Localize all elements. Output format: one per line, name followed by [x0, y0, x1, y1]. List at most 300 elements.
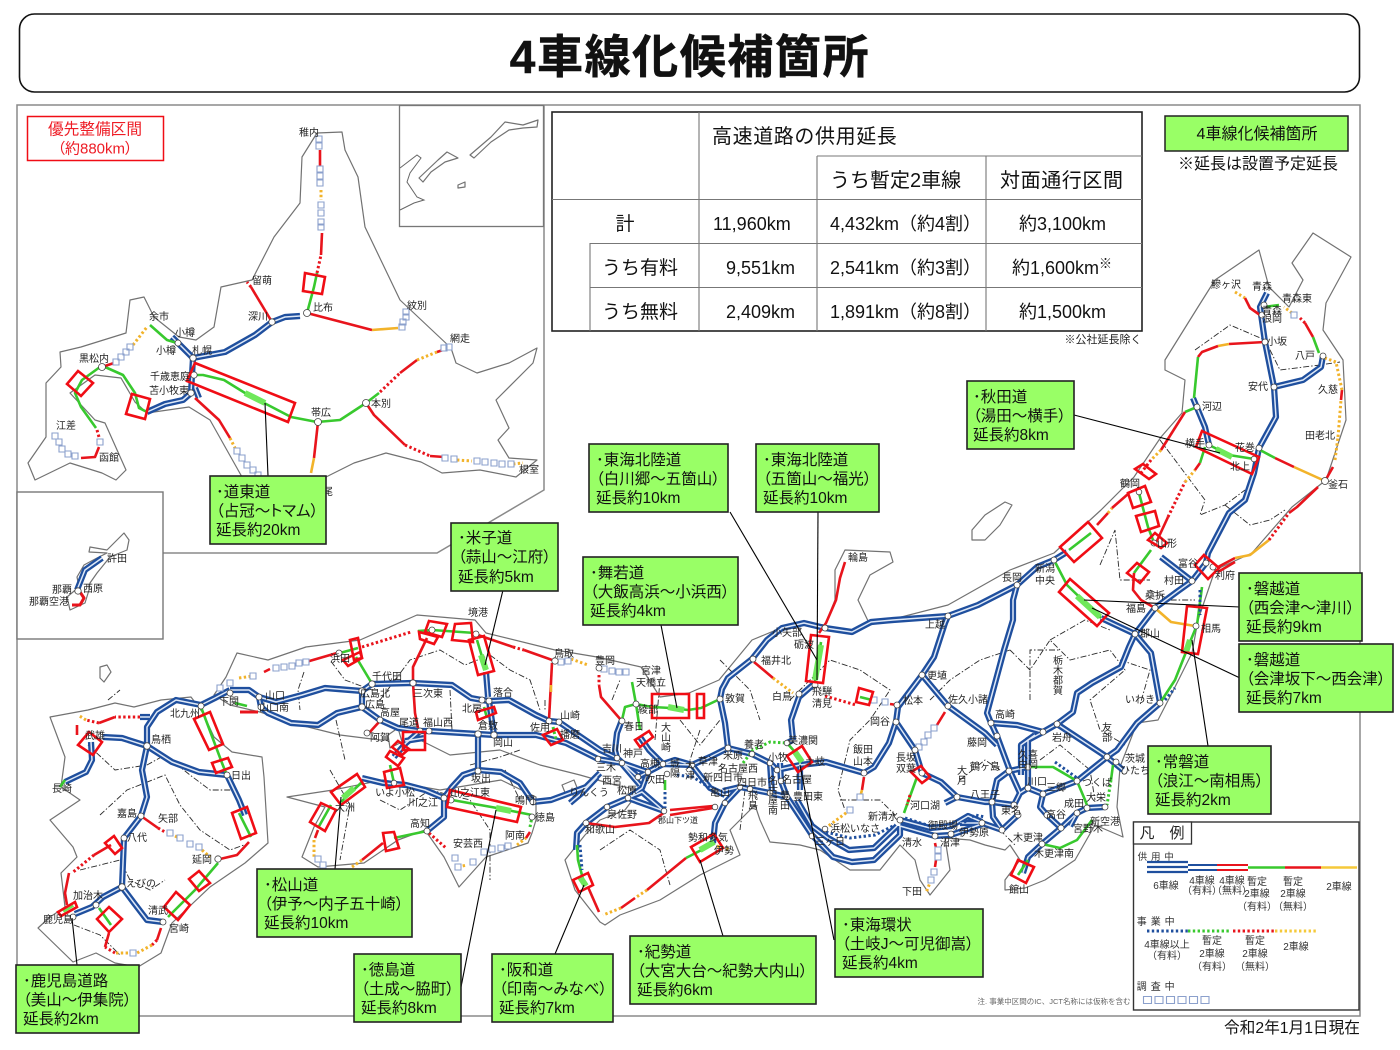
place-name labels: Tohoku: 河辺: [1202, 401, 1222, 413]
callout: 松山道: 延長約10km: [264, 914, 348, 932]
place-name labels: Hokkaido: 余市: [149, 310, 169, 323]
place-name labels: Tohoku: 八戸: [1295, 350, 1315, 362]
callout: priority section key: [28, 116, 164, 160]
place-name labels: Hokkaido: 帯広: [311, 406, 331, 419]
place-name labels: Chugoku and Kansai: 浜田: [330, 653, 350, 665]
place-name labels: Chubu and Kanto: 木更津南: [1034, 847, 1074, 860]
table: expressway length: 1,891km（約8割）: [830, 302, 981, 322]
legend: 2車線: [1280, 887, 1306, 900]
place-name labels: Chugoku and Kansai: りんくう: [569, 787, 609, 799]
place-name labels: Chubu and Kanto: 大月: [954, 764, 966, 786]
place-name labels: Hokkaido: [56, 126, 539, 498]
place-name labels: Chugoku and Kansai: 三次東: [413, 687, 443, 700]
coloured road sections: Tohoku: [1054, 292, 1342, 703]
place-name labels: Chugoku and Kansai: 天橋立: [636, 676, 666, 689]
callout: 阪和道: [492, 954, 613, 1022]
callout: 道東道: ･道東道: [216, 483, 270, 501]
legend: （無料）: [1273, 900, 1313, 913]
callout: 磐越道 会津坂下: （会津坂下～西会津）: [1246, 670, 1386, 688]
place-name labels: Chugoku and Kansai: 豊田東: [793, 790, 823, 803]
place-name labels: Tohoku: 浪岡: [1262, 313, 1282, 325]
place-name labels: Chugoku and Kansai: 四日市: [737, 776, 767, 789]
place-name labels: Chugoku and Kansai: 広島北: [360, 687, 390, 700]
title: 4車線化候補箇所: [510, 31, 870, 83]
callout: 磐越道 西会津: [1239, 573, 1362, 641]
place-name labels: Hokkaido: 苫小牧東: [149, 384, 189, 397]
legend: 調 査 中: [1137, 980, 1175, 993]
callout: 東海北陸道 五箇山: （五箇山～福光）: [763, 470, 872, 488]
coloured road sections: Hokkaido: [75, 150, 523, 473]
place-name labels: Chugoku and Kansai: 鳥取: [554, 647, 574, 660]
callout: 東海環状: 延長約4km: [842, 954, 918, 972]
place-name labels: Hokkaido: 札幌: [192, 344, 212, 357]
place-name labels: Chubu and Kanto: 岡谷: [870, 716, 890, 728]
callout: 舞若道: 延長約4km: [590, 602, 666, 620]
callout: 東海北陸道 五箇山: [756, 444, 879, 512]
footnote: provisional names: 注. 事業中区間のIC、JCT名称には仮称を含む: [978, 996, 1130, 1006]
place-name labels: Tohoku: 花巻: [1235, 441, 1255, 454]
place-name labels: Tohoku: 富谷: [1178, 557, 1198, 570]
place-name labels: Chubu and Kanto: 伊勢原: [959, 826, 989, 839]
legend: 2車線: [1244, 887, 1270, 900]
place-name labels: Chubu and Kanto: 友部: [1100, 721, 1112, 743]
place-name labels: Chugoku and Kansai: 名古屋西: [718, 762, 758, 775]
place-name labels: Hokkaido: 千歳恵庭: [150, 370, 190, 383]
callout: 磐越道 西会津: ･磐越道: [1246, 580, 1300, 598]
place-name labels: Tohoku: いわき: [1125, 694, 1155, 706]
place-name labels: Kyushu and Shikoku: 清武: [148, 904, 168, 917]
place-name labels: Tohoku: 青森: [1262, 304, 1282, 317]
place-name labels: Chubu and Kanto: 山本: [853, 755, 873, 768]
Okinawa labels: 那覇空港: [29, 596, 69, 608]
place-name labels: Tohoku: 北上: [1230, 461, 1250, 473]
table: expressway length: [552, 112, 1142, 331]
place-name labels: Tohoku: 小坂: [1267, 335, 1287, 348]
place-name labels: Chubu and Kanto: 白岡: [1018, 758, 1038, 771]
place-name labels: Hokkaido: 留萌: [252, 274, 272, 287]
table: expressway length: 4,432km（約4割）: [830, 214, 981, 234]
place-name labels: Chugoku and Kansai: 草津: [698, 756, 718, 768]
place-name labels: Tohoku: ひたち: [1120, 765, 1150, 777]
place-name labels: Chubu and Kanto: 飛島: [746, 790, 758, 811]
place-name labels: Chubu and Kanto: 新空港: [1090, 816, 1120, 828]
callout: 磐越道 西会津: 延長約9km: [1246, 618, 1322, 636]
callout: 松山道: [257, 869, 412, 937]
place-name labels: Kyushu and Shikoku: 北九州: [170, 708, 200, 720]
place-name labels: Kyushu and Shikoku: 徳島: [535, 811, 555, 824]
place-name labels: Chugoku and Kansai: 岡山: [493, 737, 513, 749]
legend: 4車線: [1189, 874, 1215, 887]
place-name labels: Hokkaido: 比布: [313, 302, 333, 314]
place-name labels: Chugoku and Kansai: 高屋: [380, 706, 400, 719]
place-name labels: Chugoku and Kansai: 勢和多気: [688, 831, 728, 844]
place-name labels: Kyushu and Shikoku: 安芸西: [453, 837, 483, 850]
place-name labels: Kyushu and Shikoku: 阿南: [505, 829, 525, 842]
place-name labels: Tohoku: 青森: [1252, 280, 1272, 293]
place-name labels: Tohoku: 久慈: [1318, 383, 1338, 396]
place-name labels: Chugoku and Kansai: 広島: [365, 698, 385, 711]
place-name labels: Chugoku and Kansai: 倉敷: [478, 719, 498, 732]
legend: [1134, 822, 1359, 1010]
place-name labels: Hokkaido: 稚内: [299, 126, 319, 139]
legend: （有料）: [1237, 900, 1277, 913]
place-name labels: Chugoku and Kansai: 福山西: [423, 716, 453, 729]
table: expressway length: ※: [1099, 256, 1112, 271]
callout: 鹿児島道路: （美山～伊集院）: [23, 991, 132, 1009]
place-name labels: Chugoku and Kansai: 西宮: [602, 774, 622, 787]
note: planned length: ※延長は設置予定延長: [1178, 155, 1338, 173]
place-name labels: Chubu and Kanto: 大栄: [1086, 791, 1106, 804]
legend: 事 業 中: [1137, 915, 1175, 928]
place-name labels: Chubu and Kanto: 館山: [1009, 883, 1029, 896]
place-name labels: Chubu and Kanto: 清水: [902, 836, 922, 849]
callout: 東海北陸道 五箇山: ･東海北陸道: [763, 451, 848, 469]
place-name labels: Tohoku: 茨城: [1125, 753, 1145, 765]
place-name labels: Kyushu and Shikoku: 延岡: [192, 854, 212, 866]
place-name labels: Chugoku and Kansai: 千代田: [372, 671, 402, 683]
place-name labels: Hokkaido: 黒松内: [79, 352, 109, 365]
callout: 徳島道: 延長約8km: [361, 999, 437, 1017]
place-name labels: Chubu and Kanto: 沼津: [940, 836, 960, 849]
place-name labels: Chugoku and Kansai: 山崎: [560, 709, 580, 722]
place-name labels: Chubu and Kanto: 高谷: [1046, 808, 1066, 821]
callout: 紀勢道: 延長約6km: [637, 981, 713, 999]
place-name labels: Tohoku: 新潟: [1035, 562, 1055, 575]
place-name labels: Kyushu and Shikoku: 嘉島: [117, 807, 137, 820]
place-name labels: Chubu and Kanto: 鶴ヶ島: [970, 760, 1000, 773]
place-name labels: Chubu and Kanto: 八王子: [970, 789, 1000, 801]
place-name labels: Chubu and Kanto: 名古屋南: [766, 774, 778, 815]
callout: priority section key: （約880km）: [57, 140, 133, 158]
legend: （有料）: [1182, 884, 1222, 897]
place-name labels: Hokkaido: 本別: [371, 397, 391, 410]
priority section markers (red rectangles): [58, 273, 1259, 932]
table: expressway length: 2,541km（約3割）: [830, 258, 981, 278]
title frame: [20, 14, 1360, 92]
legend: 暫定: [1283, 875, 1303, 888]
place-name labels: Kyushu and Shikoku: 武雄: [85, 729, 105, 742]
callout: 磐越道 会津坂下: 延長約7km: [1246, 689, 1322, 707]
callout: 東海北陸道 白川郷: ･東海北陸道: [596, 451, 681, 469]
place-name labels: Kyushu and Shikoku: 長崎: [52, 782, 72, 795]
place-name labels: Tohoku: 利府: [1215, 570, 1235, 582]
table: expressway length: うち無料: [602, 301, 678, 323]
table: expressway length: うち有料: [602, 257, 678, 279]
place-name labels: Chugoku and Kansai: 宮津: [641, 664, 661, 677]
place-name labels: Chubu and Kanto: 三ヶ日: [815, 837, 845, 848]
landmass outlines: [28, 132, 1351, 967]
table: expressway length: 計: [615, 213, 635, 235]
callout: 磐越道 会津坂下: ･磐越道: [1246, 651, 1300, 669]
place-name labels: Chubu and Kanto: 東名: [1001, 804, 1021, 817]
callout: 東海環状: （土岐J～可児御嵩）: [842, 935, 974, 953]
Okinawa labels: 許田: [107, 552, 127, 565]
place-name labels: Kyushu and Shikoku: 鳴門: [515, 794, 535, 807]
callout: 常磐道: ･常磐道: [1155, 753, 1209, 771]
legend: in-service line samples: [1147, 862, 1357, 872]
place-name labels: Kyushu and Shikoku: 日出: [231, 770, 251, 782]
legend: 暫定: [1245, 934, 1265, 947]
callout: 秋田道: （湯田～横手）: [973, 407, 1066, 425]
place-name labels: Chugoku and Kansai: 大津: [682, 759, 694, 781]
callout: 道東道: （占冠～トマム）: [216, 502, 318, 520]
callout: 鹿児島道路: [16, 965, 139, 1033]
coloured road sections: Kyushu and Shikoku: [60, 703, 532, 953]
place-name labels: Chugoku and Kansai: 阿賀: [370, 732, 390, 744]
place-name labels: Tohoku: 福島: [1126, 602, 1146, 615]
place-name labels: Hokkaido: 小樽: [175, 326, 195, 339]
place-name labels: Tohoku: 山形: [1157, 538, 1177, 550]
place-name labels: Hokkaido: 江差: [56, 419, 76, 432]
legend: 4車線以上: [1144, 938, 1190, 951]
callout: 松山道: （伊予～内子五十崎）: [264, 895, 404, 913]
Okinawa labels: 西原: [83, 583, 103, 595]
place-name labels: Chubu and Kanto: 河口湖: [910, 800, 940, 812]
legend: 2車線: [1283, 940, 1309, 953]
callout: 鹿児島道路: ･鹿児島道路: [23, 972, 109, 990]
place-name labels: Kyushu and Shikoku: 山口南: [259, 701, 289, 714]
legend: under-construction line samples: [1147, 930, 1316, 932]
legend: （有料）: [1147, 949, 1187, 962]
place-name labels: Chugoku and Kansai: 和歌山: [585, 824, 615, 836]
place-name labels: Chubu and Kanto: 三郷: [1046, 781, 1066, 794]
place-name labels: Kyushu and Shikoku: 八代: [127, 832, 147, 844]
place-name labels: Chubu and Kanto: [725, 551, 1120, 898]
callout: 常磐道: [1148, 746, 1271, 814]
place-name labels: Chugoku and Kansai: 新四日市: [703, 771, 743, 784]
place-name labels: Chugoku and Kansai: 城陽: [668, 758, 680, 779]
place-name labels: Chubu and Kanto: 飛騨: [812, 685, 832, 698]
callout: priority section key: 優先整備区間: [48, 120, 142, 138]
callout: 東海北陸道 五箇山: 延長約10km: [763, 489, 847, 507]
callout: 東海環状: ･東海環状: [842, 916, 912, 934]
place-name labels: Chubu and Kanto: 藤岡: [967, 737, 987, 749]
place-name labels: Chubu and Kanto: 高崎: [995, 708, 1015, 721]
callout: 鹿児島道路: 延長約2km: [23, 1010, 99, 1028]
callout: 4車線化候補箇所 key: [1165, 116, 1348, 173]
callout: 紀勢道: ･紀勢道: [637, 943, 691, 961]
place-name labels: Chugoku and Kansai: 落合: [493, 686, 513, 699]
table: expressway length: 対面通行区間: [1000, 169, 1124, 192]
coloured road sections: Chugoku and Kansai: [239, 630, 802, 915]
callout: 東海北陸道 白川郷: 延長約10km: [596, 489, 680, 507]
place-name labels: Chubu and Kanto: 敦賀: [725, 692, 745, 705]
place-name labels: Chugoku and Kansai: 美濃関: [788, 734, 818, 747]
table: expressway length: 2,409km: [726, 302, 795, 322]
place-name labels: Chubu and Kanto: 川口: [1027, 777, 1047, 788]
place-name labels: Chugoku and Kansai: 名古屋: [782, 773, 812, 786]
callout: 磐越道 会津坂下: [1239, 644, 1393, 712]
place-name labels: Tohoku: 相馬: [1201, 622, 1221, 635]
place-name labels: Kyushu and Shikoku: 大洲: [335, 801, 355, 814]
place-name labels: Kyushu and Shikoku: 鳥栖: [151, 733, 171, 746]
place-name labels: Chugoku and Kansai: 亀山: [710, 786, 730, 799]
place-name labels: Hokkaido: 根室: [519, 463, 539, 476]
callout: 紀勢道: （大宮大台～紀勢大内山）: [637, 962, 808, 980]
place-name labels: Chugoku and Kansai: 三木: [596, 762, 616, 774]
place-name labels: Chugoku and Kansai: 豊岡: [595, 654, 615, 667]
place-name labels: Chugoku and Kansai: 尾道: [399, 716, 419, 729]
callout: 秋田道: [967, 381, 1074, 449]
place-name labels: Chubu and Kanto: 宮野木: [1073, 822, 1103, 835]
Okinawa labels: [29, 552, 127, 608]
place-name labels: Kyushu and Shikoku: 下関: [219, 696, 239, 708]
callout: 徳島道: [354, 954, 461, 1022]
place-name labels: Kyushu and Shikoku: いよ小松: [375, 786, 415, 799]
interchange nodes: [70, 302, 1328, 925]
place-name labels: Chugoku and Kansai: [330, 607, 825, 857]
legend: 2車線: [1199, 947, 1225, 960]
place-name labels: Tohoku: [1002, 278, 1348, 777]
legend: 2車線: [1326, 880, 1352, 893]
place-name labels: Chugoku and Kansai: 播磨: [560, 728, 580, 741]
place-name labels: Tohoku: 青森東: [1282, 292, 1312, 305]
place-name labels: Tohoku: 安代: [1248, 381, 1268, 393]
place-name labels: Kyushu and Shikoku: えびの: [126, 878, 156, 890]
place-name labels: Chugoku and Kansai: 神戸: [623, 747, 643, 760]
place-name labels: Chubu and Kanto: 栃木都賀: [1050, 654, 1062, 696]
table: expressway length: うち暫定2車線: [830, 169, 961, 192]
callout: 米子道: [451, 523, 558, 591]
place-name labels: Kyushu and Shikoku: 高知: [410, 817, 430, 830]
survey-stage sections (hollow squares): [52, 136, 1297, 956]
place-name labels: Tohoku: 長岡: [1002, 572, 1022, 584]
legend: 凡 例: [1139, 825, 1185, 842]
place-name labels: Tohoku: 釜石: [1328, 478, 1348, 491]
place-name labels: Chugoku and Kansai: 小牧: [768, 751, 788, 764]
callout: 舞若道: （大飯高浜～小浜西）: [590, 583, 730, 601]
callout: 東海北陸道 白川郷: [589, 444, 728, 512]
place-name labels: Chugoku and Kansai: 高槻: [640, 757, 660, 770]
callout: 道東道: 延長約20km: [216, 521, 300, 539]
place-name labels: Chubu and Kanto: 輪島: [848, 551, 868, 564]
callout: 秋田道: ･秋田道: [973, 388, 1027, 406]
table: expressway length: 約3,100km: [1019, 214, 1106, 234]
inset: Okinawa: [17, 492, 163, 639]
place-name labels: Chubu and Kanto: 上越: [925, 618, 945, 631]
leader lines: [72, 403, 1240, 987]
place-name labels: Kyushu and Shikoku: 坂出: [471, 772, 491, 785]
place-name labels: Hokkaido: 函館: [99, 451, 119, 464]
callout: 米子道: ･米子道: [458, 529, 512, 547]
place-name labels: Tohoku: 村田: [1164, 574, 1184, 587]
place-name labels: Chubu and Kanto: 浜松いなさ: [830, 822, 880, 835]
place-name labels: Chugoku and Kansai: 郡山下ツ道: [658, 815, 698, 825]
callout: 徳島道: ･徳島道: [361, 961, 415, 979]
place-name labels: Chubu and Kanto: つくば: [1082, 777, 1112, 789]
callout: 米子道: 延長約5km: [458, 568, 534, 586]
place-name labels: Tohoku: 田老北: [1305, 429, 1335, 442]
callout: 舞若道: [583, 557, 738, 625]
place-name labels: Hokkaido: 深川: [248, 311, 268, 323]
callout: 常磐道: 延長約2km: [1155, 791, 1231, 809]
place-name labels: Chugoku and Kansai: 土岐: [805, 755, 825, 768]
place-name labels: Hokkaido: 小樽: [156, 344, 176, 357]
Okinawa labels: 那覇: [52, 584, 72, 596]
place-name labels: Chubu and Kanto: 久喜: [1018, 748, 1038, 761]
table: expressway length: 11,960km: [713, 214, 791, 234]
place-name labels: Tohoku: 中央: [1035, 574, 1055, 587]
coloured road sections: Chubu and Kanto: [754, 562, 1113, 893]
place-name labels: Kyushu and Shikoku: 矢部: [158, 812, 178, 825]
place-name labels: Chubu and Kanto: 岩舟: [1052, 731, 1072, 744]
place-name labels: Kyushu and Shikoku: 川之江東: [450, 786, 490, 799]
table: expressway length: 高速道路の供用延長: [712, 125, 897, 148]
callout: 阪和道: 延長約7km: [499, 999, 575, 1017]
callout: 阪和道: （印南～みなべ）: [499, 980, 607, 998]
place-name labels: Chubu and Kanto: 双葉: [896, 762, 916, 775]
place-name labels: Chubu and Kanto: 松本: [903, 694, 923, 707]
place-name labels: Kyushu and Shikoku: [43, 690, 555, 935]
legend: 4車線: [1219, 874, 1245, 887]
prefecture boundaries: [74, 325, 1340, 955]
place-name labels: Chubu and Kanto: 飯田: [853, 744, 873, 756]
place-name labels: Chugoku and Kansai: 松原: [617, 784, 637, 797]
callout: 4車線化候補箇所 key: 4車線化候補箇所: [1197, 125, 1317, 143]
legend: 6車線: [1153, 879, 1179, 892]
place-name labels: Chugoku and Kansai: 養老: [744, 738, 764, 751]
callout: 常磐道: （浪江～南相馬）: [1155, 772, 1264, 790]
place-name labels: Chubu and Kanto: 下田: [902, 887, 922, 898]
legend: （無料）: [1235, 960, 1275, 973]
place-name labels: Chubu and Kanto: 清見: [812, 697, 832, 710]
place-name labels: Kyushu and Shikoku: 鹿児島: [43, 913, 73, 926]
inset: northern territories: [400, 106, 544, 226]
place-name labels: Chubu and Kanto: 小矢部: [772, 626, 802, 639]
table footnote: ※公社延長除く: [1064, 332, 1142, 346]
place-name labels: Chugoku and Kansai: 吹田: [645, 773, 665, 786]
callout: 道東道: [210, 476, 326, 544]
place-name labels: Chugoku and Kansai: 春日: [624, 721, 644, 733]
place-name labels: Chugoku and Kansai: 伊勢: [714, 844, 734, 857]
place-name labels: Chugoku and Kansai: 大山崎: [658, 721, 670, 752]
place-name labels: Chubu and Kanto: 御殿場: [928, 819, 958, 832]
callout: 舞若道: ･舞若道: [590, 564, 644, 582]
legend: 暫定: [1202, 934, 1222, 947]
callout: 東海環状: [835, 909, 983, 977]
place-name labels: Chugoku and Kansai: 佐用: [530, 722, 550, 734]
place-name labels: Hokkaido: 網走: [450, 332, 470, 345]
callout: 徳島道: （土成～脇町）: [361, 980, 454, 998]
place-name labels: Chugoku and Kansai: 米原: [723, 749, 743, 762]
place-name labels: Kyushu and Shikoku: 山口: [265, 690, 285, 702]
place-name labels: Chubu and Kanto: 木更津: [1013, 832, 1043, 844]
callout: 阪和道: ･阪和道: [499, 961, 553, 979]
place-name labels: Tohoku: 横手: [1185, 437, 1205, 450]
place-name labels: Tohoku: 鰺ヶ沢: [1211, 278, 1241, 291]
legend: （有料）: [1192, 960, 1232, 973]
place-name labels: Chubu and Kanto: 豊田: [778, 789, 790, 810]
legend: 供 用 中: [1138, 851, 1174, 863]
place-name labels: Chubu and Kanto: 新清水: [868, 810, 898, 823]
place-name labels: Chugoku and Kansai: 泉佐野: [607, 808, 637, 821]
place-name labels: Chugoku and Kansai: 北房: [462, 703, 482, 715]
place-name labels: Kyushu and Shikoku: 宮崎: [169, 922, 189, 935]
place-name labels: Kyushu and Shikoku: 加治木: [73, 889, 103, 902]
legend: 暫定: [1247, 875, 1267, 888]
place-name labels: Chubu and Kanto: 砺波: [794, 638, 814, 651]
callout: 紀勢道: [630, 936, 816, 1004]
place-name labels: Chubu and Kanto: 更埴: [927, 669, 947, 682]
expressways: blue multi-lane network: [65, 293, 1323, 922]
place-name labels: Tohoku: 桑折: [1145, 589, 1165, 602]
date stamp: 令和2年1月1日現在: [1224, 1019, 1360, 1037]
place-name labels: Chubu and Kanto: 福井北: [761, 654, 791, 667]
callout: 米子道: （蒜山～江府）: [458, 548, 551, 566]
place-name labels: Hokkaido: 尾: [323, 486, 333, 498]
table: expressway length: 約1,600km: [1012, 258, 1099, 278]
callout: 磐越道 西会津: （西会津～津川）: [1246, 599, 1355, 617]
